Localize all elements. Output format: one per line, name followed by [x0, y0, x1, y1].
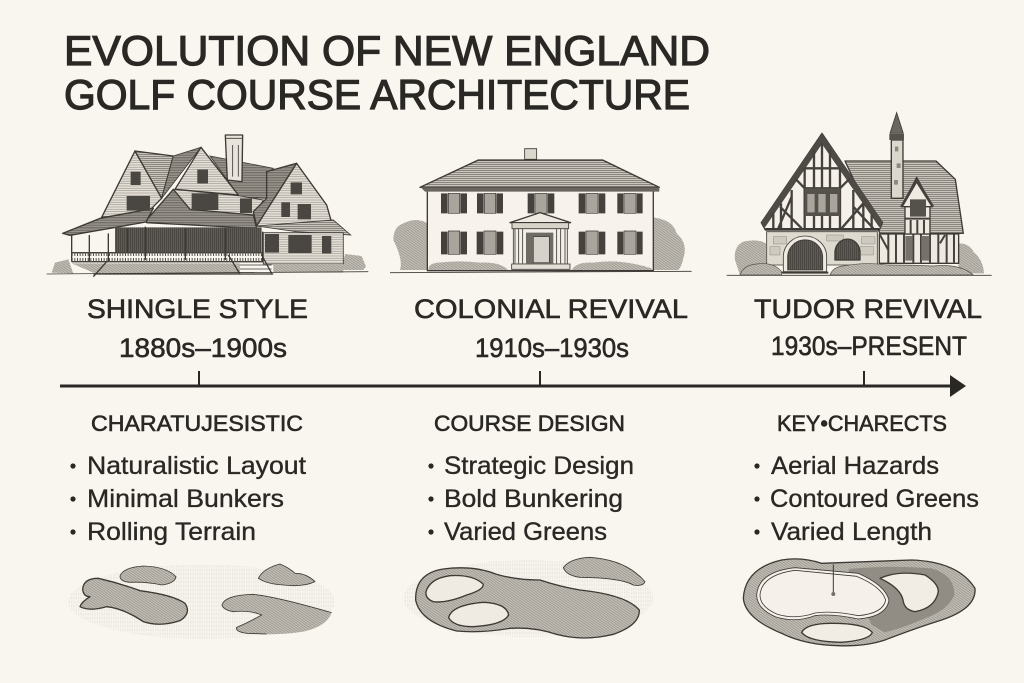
column 2: course design list: Bold Bunkering	[444, 485, 623, 513]
column 3: key characteristics list: Contoured Greens	[770, 485, 979, 513]
era label: colonial revival	[414, 294, 688, 363]
illustration: shingle style house	[47, 135, 368, 277]
column 1: characteristics list: Rolling Terrain	[87, 518, 256, 546]
timeline arrow	[60, 371, 966, 397]
title: GOLF COURSE ARCHITECTURE	[64, 71, 690, 118]
column 1: characteristics list: CHARATUJESISTIC	[91, 411, 303, 436]
illustration: colonial revival house	[390, 149, 692, 273]
title: EVOLUTION OF NEW ENGLAND	[64, 27, 710, 74]
illustration: tudor revival house	[727, 113, 992, 275]
column 2: course design list: Varied Greens	[444, 518, 607, 546]
column 3: key characteristics list: Aerial Hazards	[771, 452, 939, 480]
column 1: characteristics list: Minimal Bunkers	[87, 485, 284, 513]
era label: shingle style	[87, 294, 308, 363]
era label: shingle style: SHINGLE STYLE	[87, 294, 308, 324]
era label: colonial revival: 1910s–1930s	[475, 333, 629, 363]
era label: tudor revival: TUDOR REVIVAL	[754, 294, 982, 324]
column 2: course design list: COURSE DESIGN	[434, 411, 625, 436]
era label: colonial revival: COLONIAL REVIVAL	[414, 294, 688, 324]
column 1: characteristics list	[70, 411, 306, 546]
column 3: key characteristics list: KEY•CHARECTS	[777, 411, 947, 436]
title	[64, 27, 710, 118]
column 1: characteristics list: Naturalistic Layout	[87, 452, 306, 480]
era label: tudor revival	[754, 294, 982, 361]
era label: tudor revival: 1930s–PRESENT	[771, 331, 967, 361]
column 2: course design list	[428, 411, 634, 546]
course sketch: strategic bunkers	[403, 557, 653, 638]
column 2: course design list: Strategic Design	[444, 452, 634, 480]
course sketch: naturalistic bunkers	[68, 564, 335, 639]
era label: shingle style: 1880s–1900s	[119, 333, 287, 363]
icon: flagstick	[831, 564, 835, 596]
column 3: key characteristics list	[754, 411, 979, 546]
course sketch: contoured green	[743, 559, 975, 646]
column 3: key characteristics list: Varied Length	[771, 518, 932, 546]
